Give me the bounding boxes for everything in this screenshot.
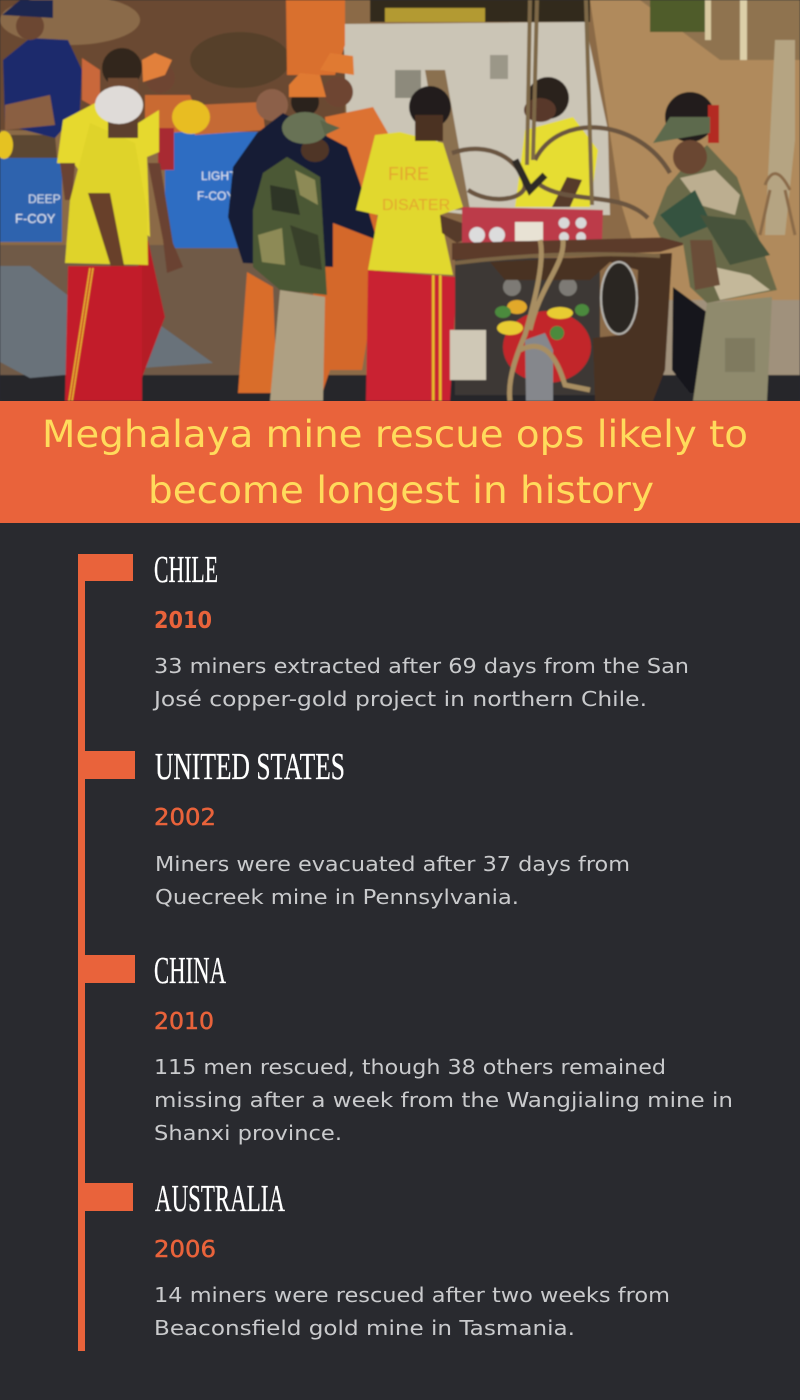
year: 2010: 2010 xyxy=(154,1009,214,1035)
fire and disaster worker xyxy=(356,86,468,401)
title text xyxy=(42,413,748,512)
heading: China: CHINA xyxy=(154,950,226,992)
blue crate: Light F-Coy xyxy=(165,132,265,248)
description xyxy=(152,654,689,711)
description: Quecreek mine in Pennsylvania. xyxy=(155,885,519,909)
entry: China xyxy=(154,950,733,1145)
year: 2002: 2002 xyxy=(154,805,216,831)
army man xyxy=(653,92,777,401)
description xyxy=(154,1283,670,1340)
fire and disaster worker: FIRE xyxy=(388,164,429,184)
description: 14 miners were rescued after two weeks from xyxy=(154,1283,670,1307)
year: 2006: 2006 xyxy=(154,1237,216,1263)
blue crate: Deep F-Coy xyxy=(0,158,62,242)
description: missing after a week from the Wangjialing mine in xyxy=(154,1088,733,1112)
description: 33 miners extracted after 69 days from the San xyxy=(154,654,689,678)
timeline: vertical bar and flags xyxy=(78,554,135,1351)
description xyxy=(154,1055,733,1145)
description: Shanxi province. xyxy=(154,1121,342,1145)
worker with bandana xyxy=(65,86,148,401)
description xyxy=(155,852,630,909)
photo: rescue workers at the mine xyxy=(0,0,800,401)
blue crate: Deep F-Coy: DEEP xyxy=(28,192,61,206)
heading: United States: UNITED STATES xyxy=(155,746,345,788)
pump machine xyxy=(450,207,683,401)
description: Miners were evacuated after 37 days from xyxy=(155,852,630,876)
fire and disaster worker: DISATER xyxy=(382,197,450,214)
heading: Chile: CHILE xyxy=(154,549,218,591)
soldier in camouflage xyxy=(253,112,340,401)
year: 2010: 2010 xyxy=(154,608,212,634)
navy jacket xyxy=(228,113,377,267)
blue crate: Light F-Coy: LIGHT xyxy=(201,169,237,183)
steel cables xyxy=(452,127,670,218)
entry: Australia xyxy=(154,1178,670,1340)
description: 115 men rescued, though 38 others remained xyxy=(154,1055,666,1079)
title text: Meghalaya mine rescue ops likely to xyxy=(42,413,748,456)
entry: United States xyxy=(154,746,630,909)
description: Beaconsfield gold mine in Tasmania. xyxy=(154,1316,575,1340)
entry: Chile xyxy=(152,549,689,711)
blue crate: Light F-Coy: F-COY xyxy=(197,189,234,203)
description: José copper-gold project in northern Chile. xyxy=(152,687,647,711)
blue crate: Deep F-Coy: F-COY xyxy=(15,211,56,226)
heading: Australia: AUSTRALIA xyxy=(155,1178,285,1220)
title banner xyxy=(0,401,800,523)
title text: become longest in history xyxy=(148,469,654,512)
